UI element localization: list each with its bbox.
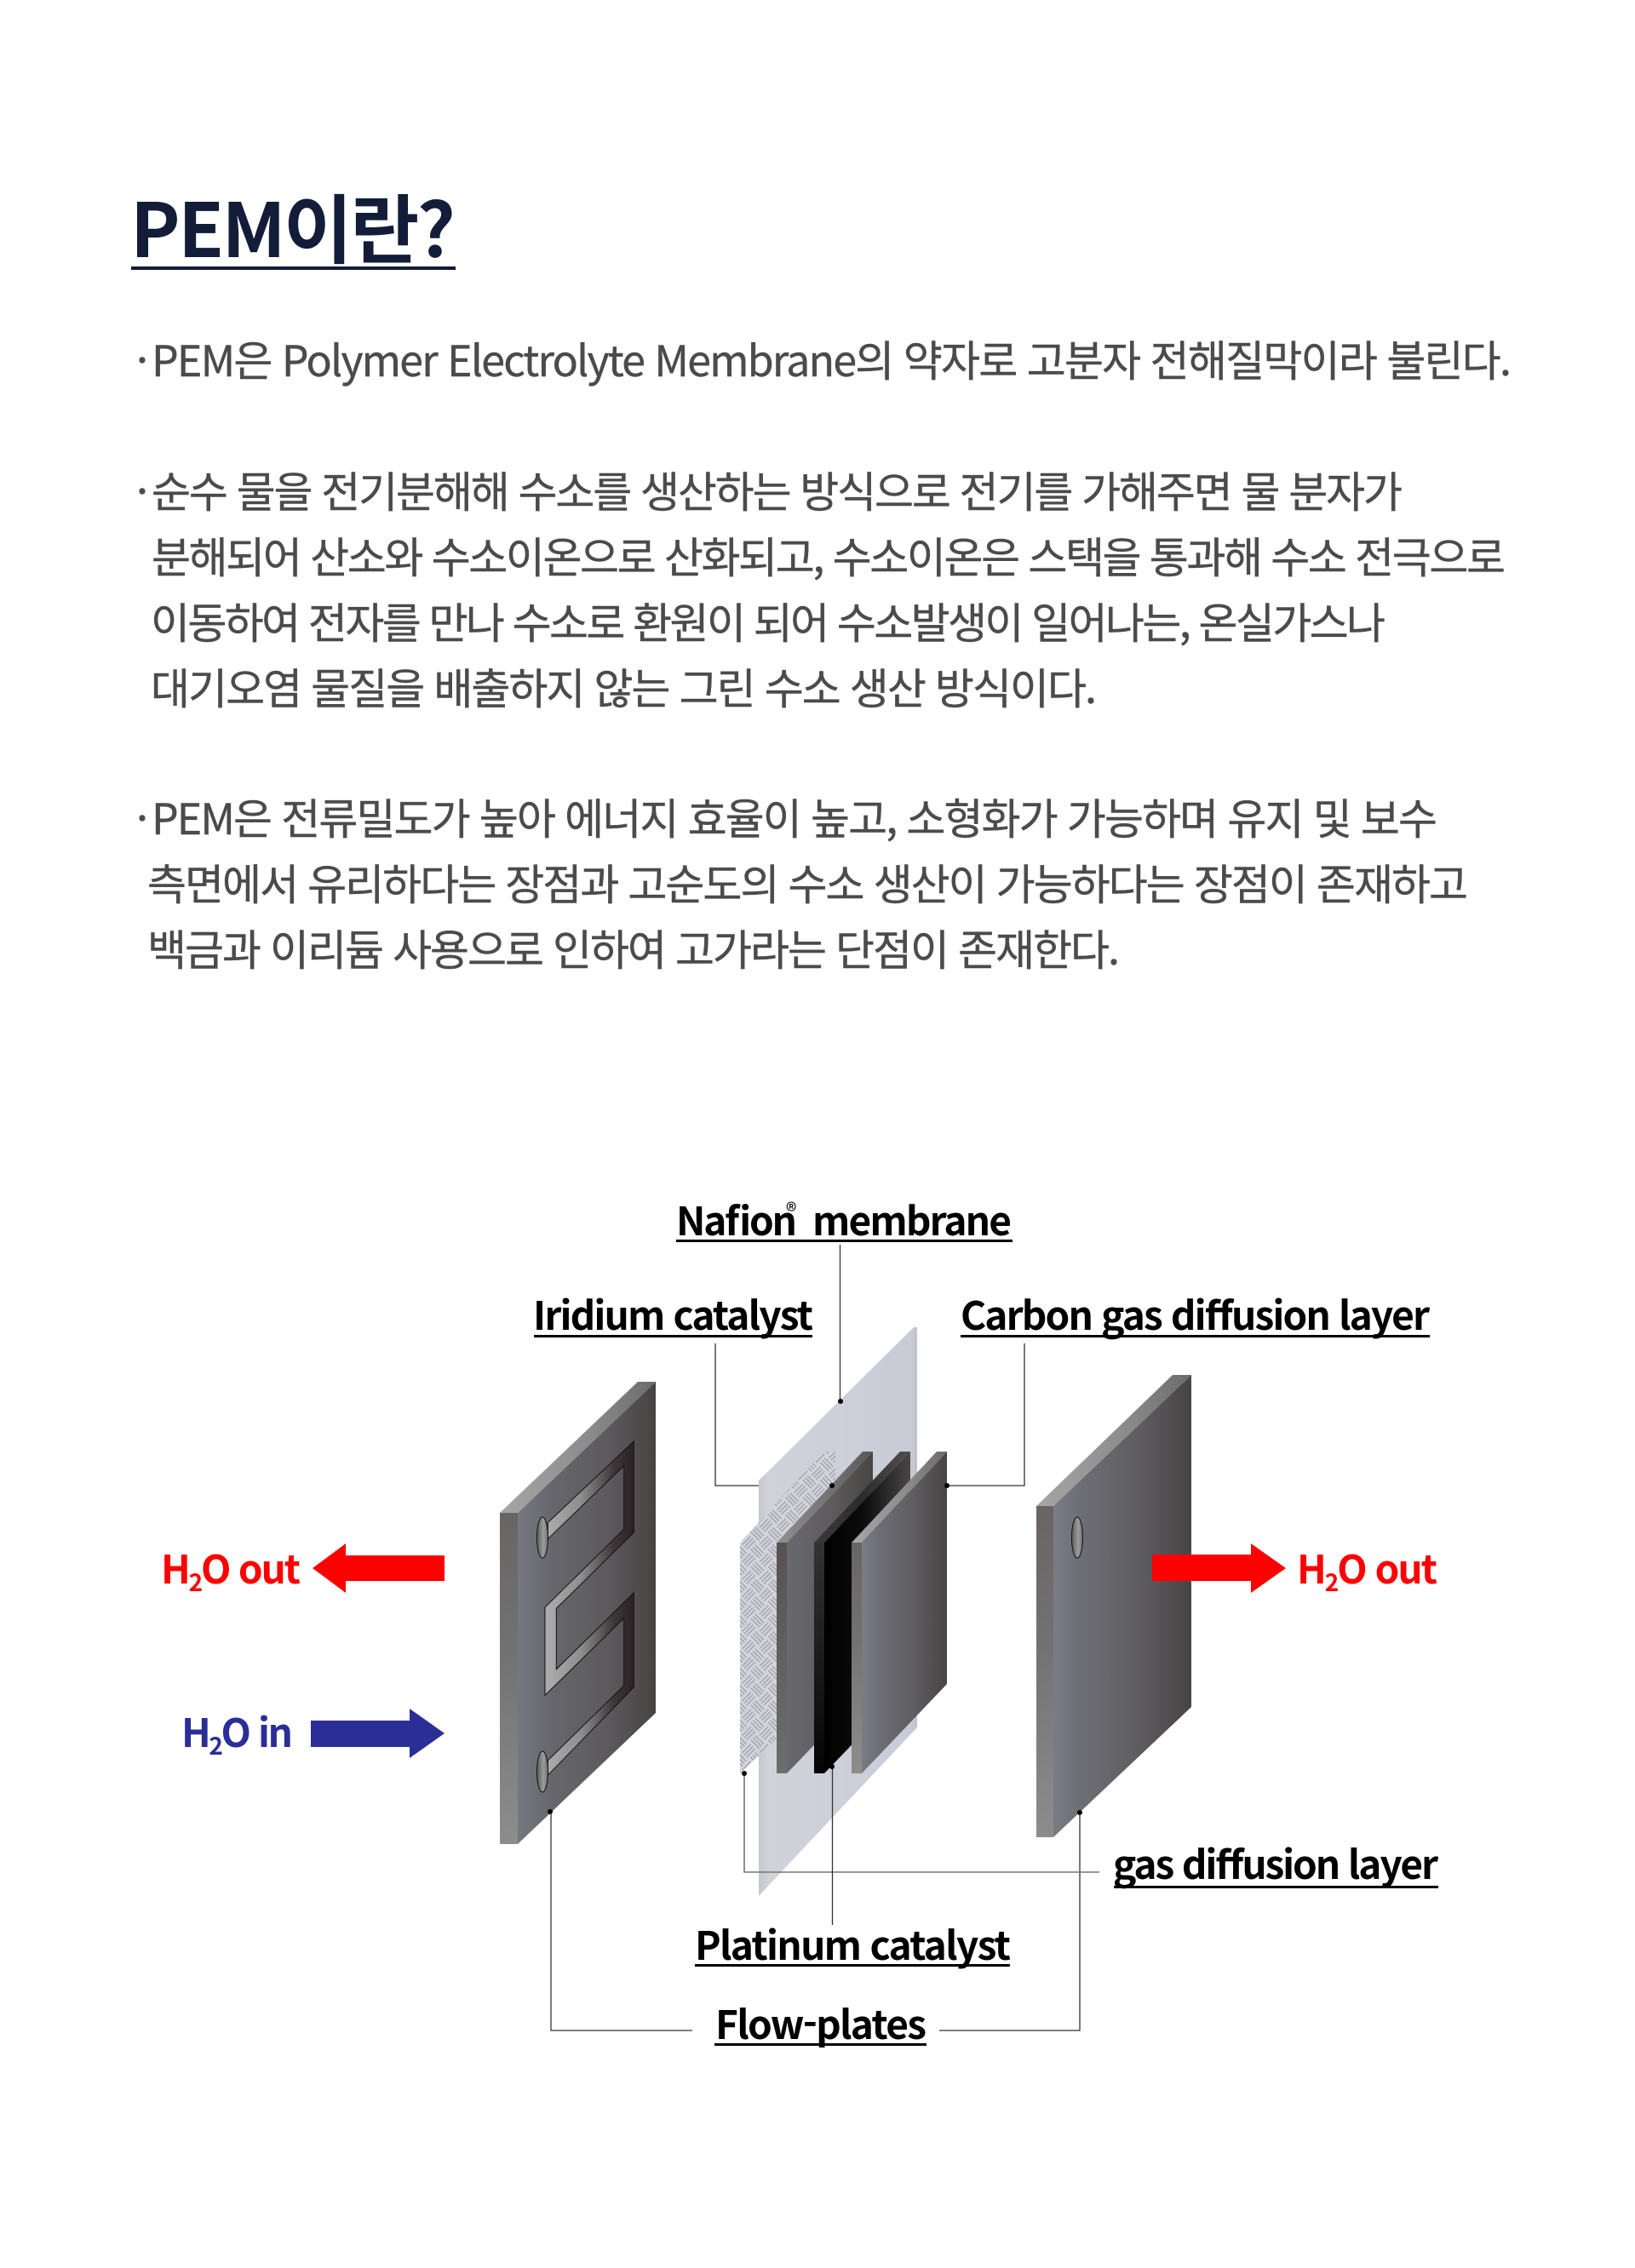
leader lines: [551, 1245, 1080, 2030]
left flow plate: [500, 1382, 656, 1844]
text block: pros and cons: 백금과 이리듐 사용으로 인하여 고가라는 단점이 존재한다.: [147, 917, 1120, 978]
text block: production method: [136, 459, 1506, 717]
label: H2O out (left): O out: [201, 1539, 301, 1595]
arrow: H2O in (blue): [311, 1709, 445, 1758]
label: Flow-plates: Flow-plates: [715, 1995, 926, 2051]
text block: pros and cons: 측면에서 유리하다는 장점과 고순도의 수소 생산이 가능하다는 장점이 존재하고: [147, 851, 1468, 913]
label: H2O out (right): O out: [1337, 1539, 1437, 1595]
text block: pros and cons: [136, 786, 1468, 978]
diagram: PEM electrolyser stack: [500, 1245, 1191, 2030]
right flow plate: [1036, 1375, 1191, 1837]
label: Platinum catalyst: Platinum catalyst: [695, 1916, 1011, 1972]
text block: pros and cons: PEM은 전류밀도가 높아 에너지 효율이 높고, 소형화가 가능하며 유지 및 보수: [152, 786, 1437, 847]
connector dots: [548, 1399, 1082, 1815]
label: Nafion membrane: [676, 1191, 1013, 1247]
label: Nafion membrane: Nafion: [676, 1191, 797, 1247]
text block: definition of PEM: ·: [136, 328, 148, 389]
label: gas diffusion layer: gas diffusion layer: [1113, 1835, 1439, 1891]
label: H2O out (right): H: [1297, 1539, 1327, 1595]
leader lines over membrane: [744, 1767, 1099, 1925]
Nafion membrane sheet: [759, 1327, 917, 1896]
label: H2O out (left): H: [161, 1539, 191, 1595]
carbon plate 1: [777, 1452, 873, 1773]
arrow: H2O out left (red): [313, 1544, 445, 1593]
icon: serpentine flow channel: [545, 1441, 634, 1775]
text block: definition of PEM: PEM은 Polymer Electrolyte Membrane의 약자로 고분자 전해질막이라 불린다.: [152, 328, 1512, 389]
text block: production method: 이동하여 전자를 만나 수소로 환원이 되어 수소발생이 일어나는, 온실가스나: [151, 590, 1385, 651]
text block: production method: ·: [136, 459, 148, 520]
platinum catalyst layer (black): [814, 1452, 910, 1773]
text block: production method: 대기오염 물질을 배출하지 않는 그린 수소 생산 방식이다.: [151, 656, 1097, 717]
arrow: H2O out right (red): [1152, 1544, 1286, 1593]
iridium catalyst mesh: [740, 1452, 835, 1773]
title: PEM이란?: [130, 171, 456, 279]
label: H2O in: O in: [221, 1703, 293, 1759]
text block: production method: 순수 물을 전기분해해 수소를 생산하는 방식으로 전기를 가해주면 물 분자가: [152, 459, 1403, 520]
text block: pros and cons: ·: [136, 786, 148, 847]
label: Iridium catalyst: Iridium catalyst: [533, 1286, 813, 1342]
label: H2O out (left): 2: [189, 1565, 203, 1599]
label: H2O out (right): 2: [1325, 1565, 1339, 1599]
label: H2O in: H: [181, 1703, 211, 1759]
label: Carbon gas diffusion layer: Carbon gas diffusion layer: [961, 1286, 1431, 1342]
label: Nafion membrane: ®: [786, 1194, 796, 1226]
label: H2O in: 2: [209, 1728, 223, 1762]
text block: production method: 분해되어 산소와 수소이온으로 산화되고, 수소이온은 스택을 통과해 수소 전극으로: [152, 524, 1506, 586]
label: Nafion membrane: membrane: [812, 1191, 1012, 1247]
carbon plate 3: [852, 1452, 947, 1773]
